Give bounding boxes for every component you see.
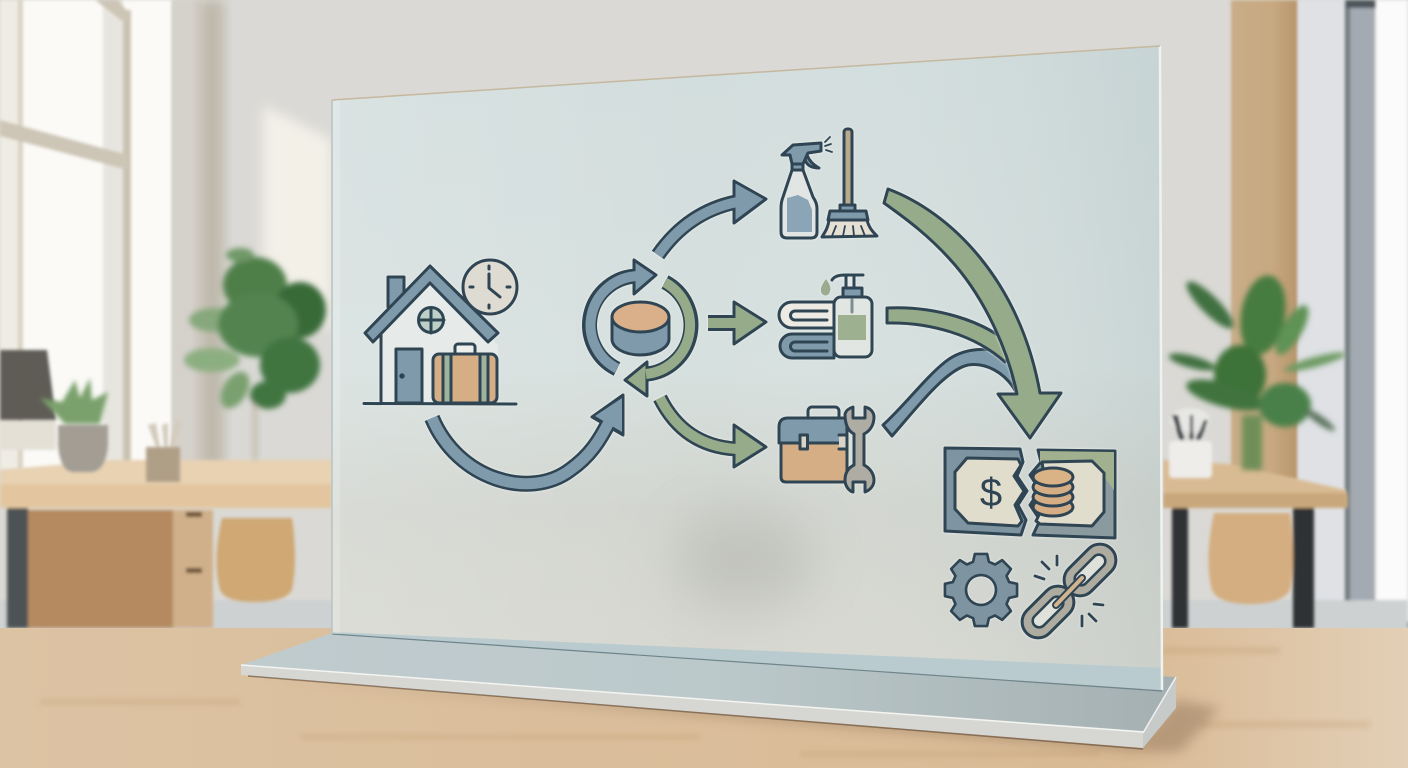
- chain link: middle: [1056, 578, 1082, 605]
- chain link: lower left: [1015, 579, 1081, 645]
- shadow under base: [255, 678, 1220, 752]
- banknote left half: [945, 448, 1027, 535]
- droplet: [821, 279, 830, 296]
- arrow: house to cycle: [432, 395, 623, 484]
- cycle arrow: blue: [590, 260, 656, 369]
- plant: right large: [1167, 272, 1347, 470]
- break sparks: [1035, 556, 1103, 626]
- icon: broken chain link: [1015, 537, 1123, 645]
- arrow: linens cost to total: [887, 308, 1016, 362]
- arrow: tools cost to total: [883, 349, 1016, 436]
- door: [396, 349, 422, 403]
- wood grain: [40, 648, 1370, 756]
- desk: left: [0, 420, 332, 628]
- arrow: cleaning cost to total: [884, 189, 1061, 438]
- pencil cup: [146, 420, 182, 482]
- desk: right: [1163, 460, 1348, 628]
- icon: gear: [945, 554, 1017, 626]
- wood pillar: [1231, 0, 1298, 480]
- white pot with pens: [1169, 408, 1212, 478]
- chain link: upper right: [1057, 537, 1123, 603]
- icon: spray bottle and broom: [781, 129, 877, 238]
- coin stack: [1033, 468, 1073, 516]
- wrench: [845, 407, 874, 492]
- frosted glass panel: [332, 46, 1162, 691]
- clock: [463, 260, 517, 314]
- icon: toolbox and wrench: [779, 407, 874, 492]
- arrow: cycle to linens: [708, 302, 766, 344]
- round window: [418, 308, 444, 333]
- dollar sign: $: [980, 471, 1002, 515]
- icon: house with clock and suitcase: [364, 260, 517, 404]
- arrow: cycle to tools: [660, 398, 766, 467]
- icon: torn banknote with coins: [945, 448, 1115, 538]
- floor: [0, 600, 1408, 632]
- window: left: [0, 0, 172, 470]
- banknote right half: [1030, 450, 1115, 538]
- soap dispenser: [832, 275, 872, 357]
- spray bottle: [781, 137, 832, 238]
- small potted plant: [40, 378, 108, 472]
- monitor: [0, 350, 56, 420]
- chimney: [388, 277, 404, 307]
- icon: towels and soap dispenser: [779, 275, 872, 358]
- toolbox: [779, 407, 847, 482]
- window light patch on wall: [263, 105, 332, 330]
- glass panel base: [241, 633, 1176, 749]
- house wall: [381, 285, 497, 403]
- table top: [0, 628, 1408, 768]
- window: right: [1345, 0, 1408, 628]
- plant: left large: [184, 248, 326, 460]
- arrow: cycle to cleaning: [658, 181, 766, 255]
- wood disc: [612, 302, 669, 355]
- suitcase: [433, 344, 497, 403]
- icon: inventory disc with cycle arrows: [590, 260, 691, 396]
- cycle arrow: green: [625, 282, 691, 396]
- roof: [365, 266, 498, 342]
- wall corner shading: [172, 0, 202, 480]
- wall: right of pillar: [1298, 0, 1345, 625]
- broom: [822, 129, 877, 237]
- towels: [779, 302, 834, 358]
- ground line: [364, 402, 516, 406]
